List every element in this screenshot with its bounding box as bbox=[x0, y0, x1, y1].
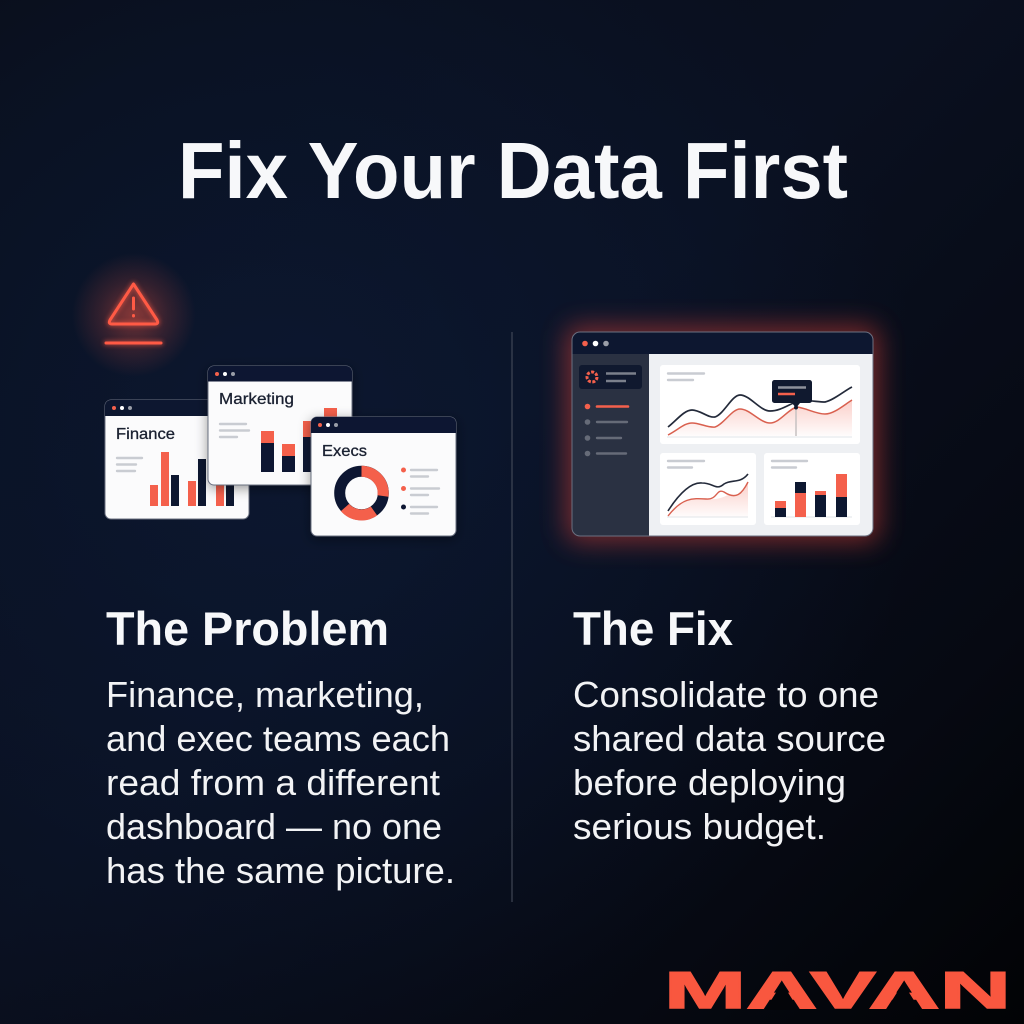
icon: warning triangle bbox=[72, 253, 196, 377]
card: stacked bars bbox=[764, 453, 860, 525]
text block: problem description: Finance, marketing, bbox=[106, 674, 424, 715]
card: main line chart bbox=[660, 365, 860, 444]
chart: donut bbox=[340, 471, 383, 515]
text block: fix description: shared data source bbox=[573, 718, 886, 759]
red glow bbox=[566, 326, 879, 542]
column divider bbox=[511, 332, 513, 902]
window: Marketing: Marketing bbox=[219, 391, 294, 408]
header bar bbox=[572, 332, 873, 354]
text block: problem description: dashboard — no one bbox=[106, 806, 442, 847]
text block: problem description bbox=[106, 674, 455, 891]
text block: fix description: before deploying bbox=[573, 762, 846, 803]
logo: MAVAN bbox=[664, 962, 1011, 1020]
window: Finance bbox=[105, 400, 249, 519]
chart: Marketing bars bbox=[261, 408, 337, 472]
chart: Finance bars bbox=[150, 452, 234, 506]
window: Finance: Finance bbox=[116, 426, 175, 443]
title: Fix Your Data First bbox=[178, 126, 848, 215]
logo: MAVAN: MAVAN bbox=[664, 962, 1011, 1020]
sidebar bbox=[572, 354, 649, 536]
window: Execs: Execs bbox=[322, 443, 367, 460]
tooltip bbox=[772, 380, 812, 410]
text block: fix description: serious budget. bbox=[573, 806, 826, 847]
text block: problem description: read from a different bbox=[106, 762, 440, 803]
panel: fix dashboard bbox=[566, 326, 879, 542]
heading: The Fix: The Fix bbox=[573, 602, 733, 655]
text block: problem description: has the same picture. bbox=[106, 850, 455, 891]
text block: fix description: Consolidate to one bbox=[573, 674, 879, 715]
heading: The Problem: The Problem bbox=[106, 602, 389, 655]
text block: problem description: and exec teams each bbox=[106, 718, 450, 759]
card: curve chart bbox=[660, 453, 756, 525]
panel: problem dashboards bbox=[105, 366, 456, 536]
legend bbox=[401, 468, 439, 514]
window: Marketing bbox=[208, 366, 352, 485]
window: Execs bbox=[311, 417, 456, 536]
text block: fix description bbox=[573, 674, 886, 847]
